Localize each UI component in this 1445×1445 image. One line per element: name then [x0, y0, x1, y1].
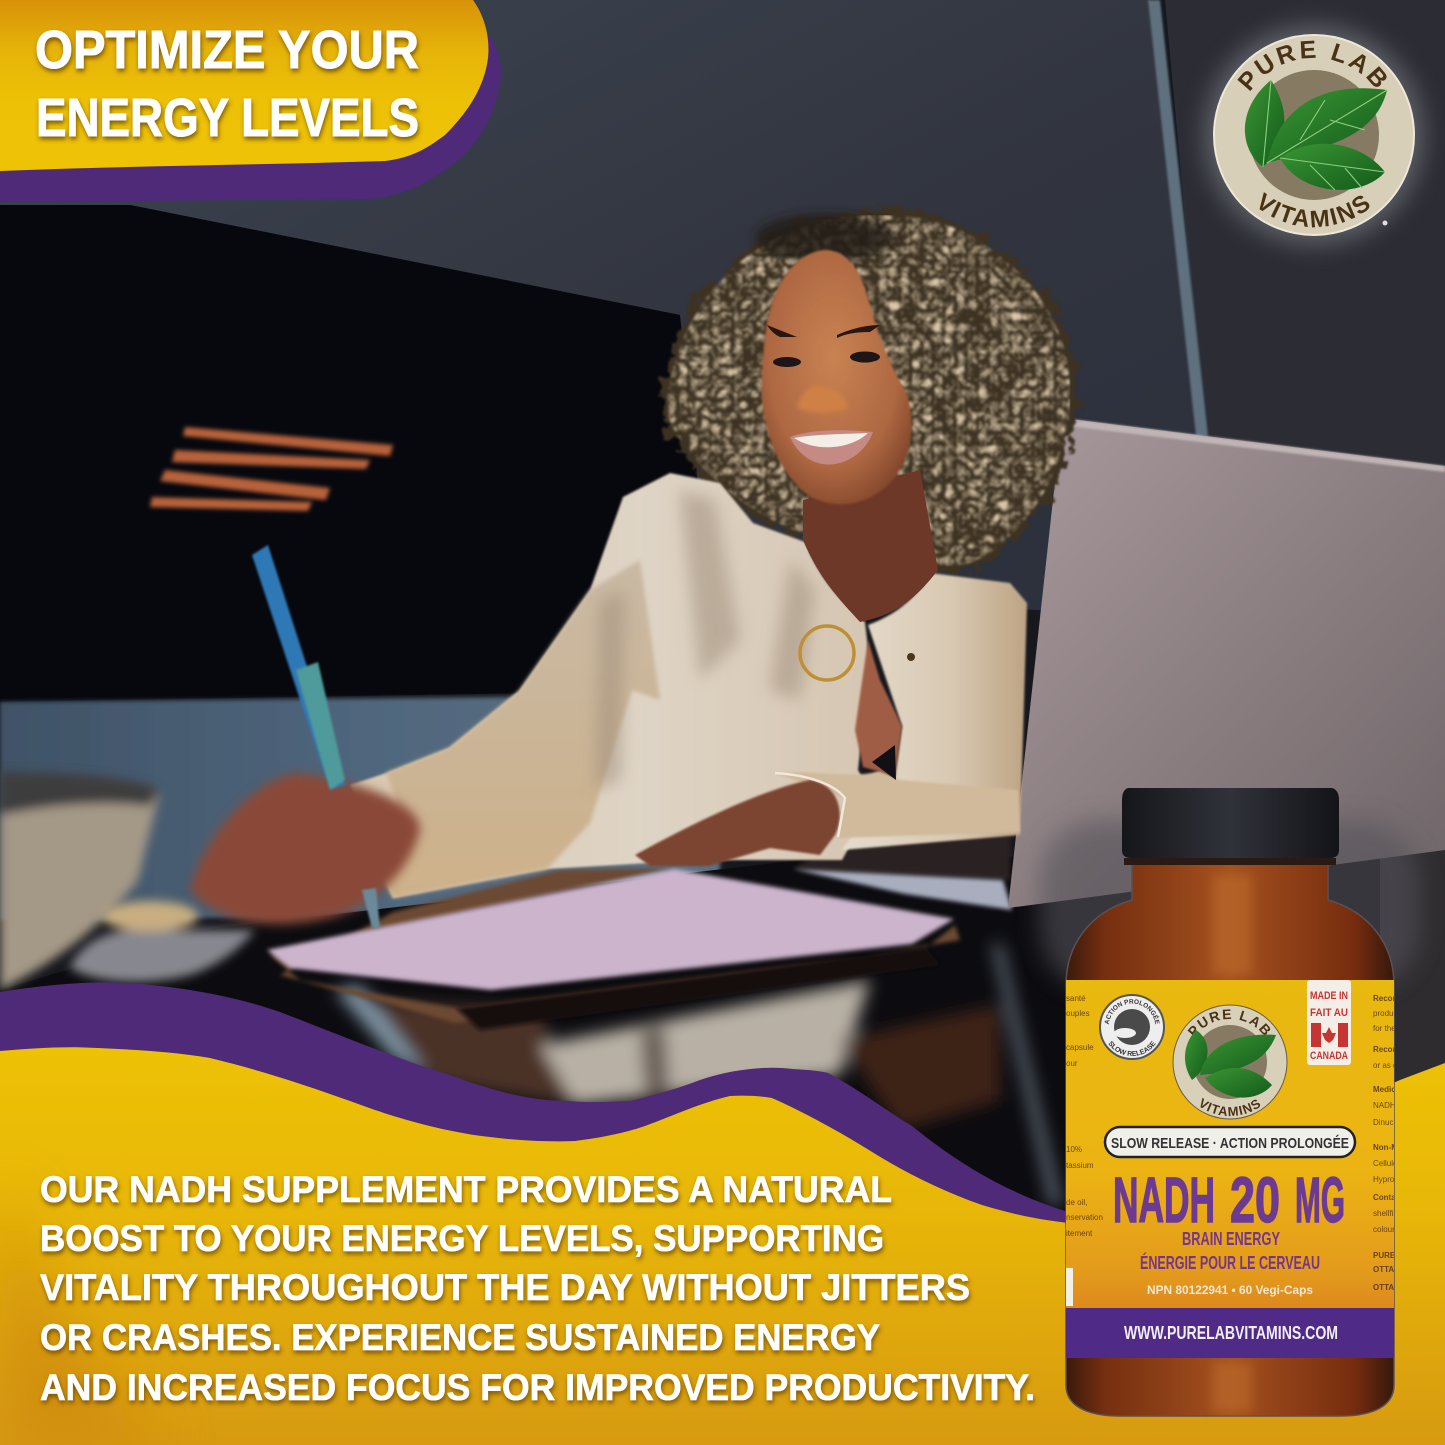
body text: AND INCREASED FOCUS FOR IMPROVED PRODUCTIVITY. — [40, 1367, 1035, 1408]
notebook shadow — [456, 948, 940, 1030]
slow release pill — [1105, 1127, 1355, 1157]
slow release badge — [1099, 994, 1165, 1060]
label side fine print: production — [1373, 1009, 1410, 1018]
logo: Pure Lab Vitamins badge: VITAMINS — [1260, 192, 1370, 228]
label side fine print: tassium — [1066, 1161, 1094, 1170]
orange corner glow — [0, 1180, 170, 1445]
bottle bottom highlight — [1212, 1362, 1252, 1412]
floor — [0, 695, 720, 920]
label side fine print: itement — [1066, 1229, 1093, 1238]
label side fine print: santé — [1066, 994, 1086, 1003]
wall divider line — [1148, 0, 1208, 436]
label side fine print: de oil, — [1066, 1198, 1087, 1207]
eyebrows — [767, 325, 880, 338]
label side fine print: Dinucleotide — [1373, 1118, 1418, 1127]
label side fine print: FICACITÉ — [1066, 1328, 1104, 1337]
right hand — [635, 780, 840, 866]
sleeve — [370, 560, 660, 898]
dark area right of bottle — [1380, 850, 1445, 1090]
url: WWW.PURELABVITAMINS.COM — [1124, 1323, 1338, 1343]
label logo — [1172, 1004, 1288, 1120]
neck — [803, 470, 938, 622]
writing hand — [190, 773, 420, 924]
label side fine print: Hypromellose — [1373, 1175, 1422, 1184]
made in canada badge: FAIT AU — [1310, 1007, 1348, 1019]
nose — [798, 385, 848, 412]
label side fine print: nservation — [1066, 1213, 1103, 1222]
bottle halo — [1040, 820, 1420, 990]
eyes — [773, 352, 880, 367]
top banner: purple back shape — [0, 30, 501, 202]
logo leaves — [1245, 80, 1387, 190]
orange light streaks — [150, 427, 393, 511]
label side fine print: Cellulose — [1373, 1159, 1406, 1168]
laptop lid — [1008, 418, 1445, 908]
dark desk — [0, 850, 1445, 1445]
saucer — [70, 901, 255, 982]
label side fine print: NADH from — [1373, 1101, 1414, 1110]
cuff line — [775, 773, 845, 837]
pen — [252, 545, 380, 928]
label side fine print: for the main — [1373, 1024, 1415, 1033]
button — [907, 653, 915, 661]
label side fine print: Contains — [1373, 1193, 1408, 1202]
label side fine print: PURE LAB — [1373, 1251, 1414, 1260]
top banner: yellow shape — [0, 0, 488, 171]
bottle highlight — [1212, 875, 1252, 975]
crown shadow — [755, 214, 895, 262]
body text: VITALITY THROUGHOUT THE DAY WITHOUT JITTERS — [40, 1267, 970, 1308]
desk reflection — [335, 944, 1062, 1205]
label side fine print: PURE — [1387, 1328, 1410, 1337]
logo text: PURE LAB — [1237, 40, 1387, 91]
label side fine print: Medicinal — [1373, 1085, 1409, 1094]
logo: Pure Lab Vitamins badge — [1194, 14, 1434, 256]
body text: OUR NADH SUPPLEMENT PROVIDES A NATURAL — [40, 1169, 892, 1210]
label side fine print: shellfish — [1373, 1209, 1402, 1218]
label logo: PURE LAB — [1188, 1009, 1270, 1035]
right sleeve — [775, 770, 1020, 838]
top under blouse — [872, 745, 896, 780]
product bottle: MG — [1295, 1164, 1345, 1236]
label side fine print — [1066, 995, 1394, 1290]
label side fine print: Recommended — [1373, 994, 1430, 1003]
slow release badge: SLOW RELEASE — [1108, 1040, 1156, 1056]
body text: OR CRASHES. EXPERIENCE SUSTAINED ENERGY — [40, 1317, 880, 1358]
label side fine print: OTTAWA — [1373, 1265, 1407, 1274]
ring brooch — [800, 626, 854, 680]
label side fine print: Recommended — [1373, 1045, 1430, 1054]
slow release pill: SLOW RELEASE · ACTION PROLONGÉE — [1111, 1135, 1349, 1152]
label side fine print: Non-Medicinal — [1373, 1143, 1428, 1152]
label side fine print: colours — [1373, 1225, 1399, 1234]
paper notebook — [267, 869, 954, 990]
body text — [40, 1169, 1035, 1408]
notebook tan edge — [270, 868, 960, 1023]
bottle glass — [1066, 858, 1394, 1416]
smile — [790, 430, 873, 464]
left jacket shoulder + sleeve — [350, 473, 875, 898]
barcode stub — [1066, 1268, 1073, 1306]
product name: 20 — [1230, 1164, 1280, 1236]
energie pour le cerveau: ÉNERGIE POUR LE CERVEAU — [1140, 1252, 1320, 1273]
made in canada badge — [1307, 980, 1351, 1065]
bottom wave: yellow — [0, 1047, 1445, 1445]
label side fine print: our — [1066, 1059, 1078, 1068]
label logo: VITAMINS — [1200, 1098, 1260, 1116]
product bottle — [1030, 788, 1426, 1417]
right wall panel — [1165, 0, 1445, 470]
bottom wave: purple — [0, 982, 1075, 1445]
label side fine print: OTTAWA — [1373, 1283, 1407, 1292]
label side fine print: or as directed — [1373, 1061, 1421, 1070]
label purple band — [1066, 1308, 1394, 1358]
title — [35, 20, 419, 148]
laptop keyboard area — [793, 826, 1010, 880]
cap — [1122, 788, 1339, 865]
npn line: NPN 80122941 • 60 Vegi-Caps — [1147, 1283, 1313, 1297]
slow release badge: ACTION PROLONGÉE — [1104, 999, 1160, 1024]
title: ENERGY LEVELS — [36, 88, 419, 148]
brain energy: BRAIN ENERGY — [1182, 1229, 1280, 1249]
chest — [855, 640, 902, 776]
title: OPTIMIZE YOUR — [35, 20, 419, 80]
dark window area — [0, 205, 720, 702]
coffee cup — [0, 772, 160, 990]
label side fine print: capsule — [1066, 1043, 1094, 1052]
label — [1066, 980, 1394, 1358]
laptop base — [793, 869, 1012, 910]
label side fine print: ouples — [1066, 1009, 1090, 1018]
face — [762, 250, 912, 504]
made in canada badge: CANADA — [1310, 1050, 1348, 1062]
label side fine print: 10% — [1066, 1145, 1082, 1154]
hair — [660, 209, 1078, 573]
woman — [190, 209, 1078, 928]
made in canada badge: MADE IN — [1310, 990, 1348, 1002]
body text: BOOST TO YOUR ENERGY LEVELS, SUPPORTING — [40, 1218, 884, 1259]
wall panel — [0, 0, 1200, 610]
jacket fold shadows — [595, 490, 815, 790]
product name: NADH — [1113, 1164, 1215, 1236]
right jacket panel — [842, 573, 1027, 850]
